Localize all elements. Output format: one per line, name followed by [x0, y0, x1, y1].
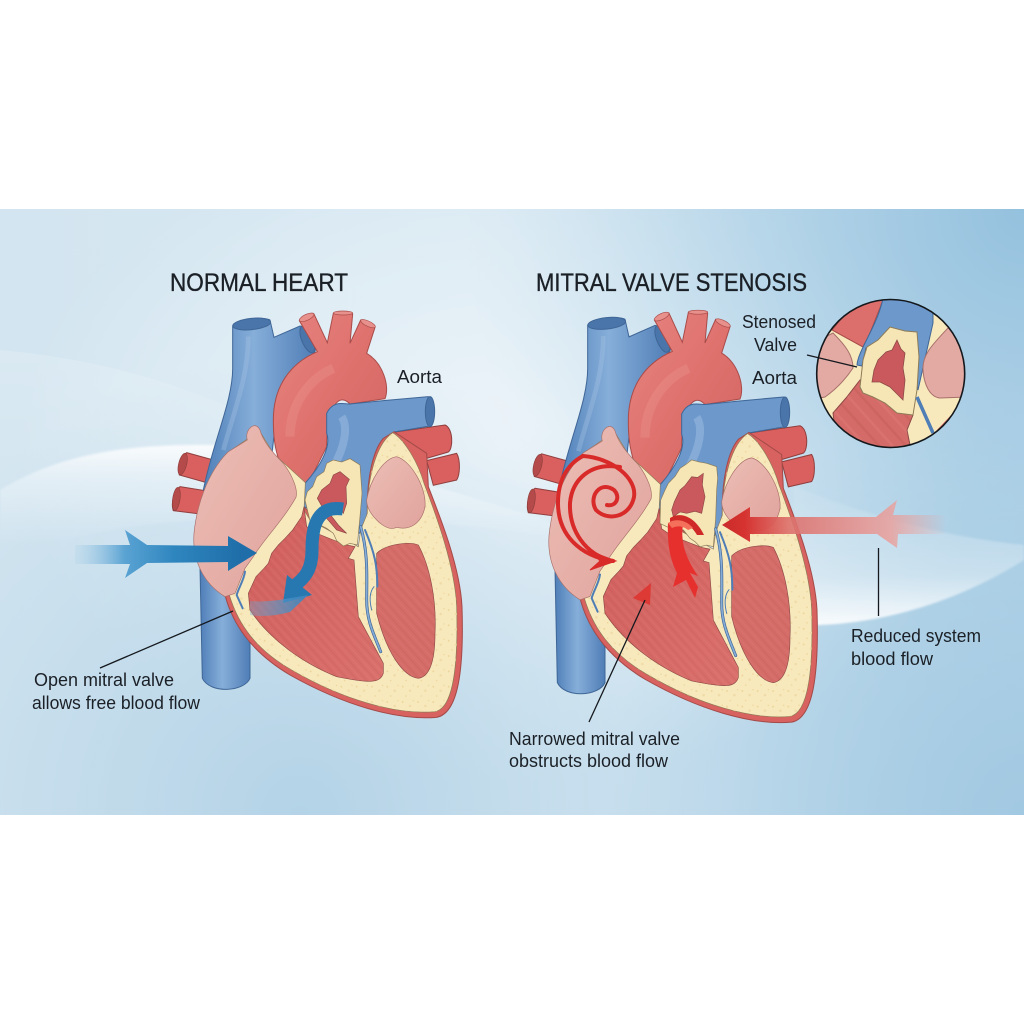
arrow: blue inflow: [75, 530, 257, 578]
heart outer wall: [225, 432, 462, 718]
label: open mitral valve: [32, 670, 201, 713]
label: narrowed mitral valve: obstructs blood flow: [509, 751, 669, 771]
heart outer wall: [580, 433, 817, 723]
inset: right chamber: [923, 328, 968, 398]
label: aorta right: Aorta: [752, 367, 798, 388]
main ventricle: [603, 509, 738, 686]
leader line: narrowed valve: [589, 600, 645, 722]
open valve ring: [305, 459, 362, 546]
label: reduced system blood flow: Reduced system: [851, 626, 981, 646]
background band: [0, 209, 1024, 815]
title: normal heart: NORMAL HEART: [170, 269, 348, 297]
vena cava upper: [203, 316, 318, 490]
arrow: small red triangle: [633, 583, 651, 605]
aortic arch: [273, 311, 387, 487]
inset: chordae: [917, 397, 933, 433]
label: stenosed valve: [742, 312, 816, 355]
label: stenosed valve: Valve: [754, 335, 797, 355]
leader line: reduced flow: [878, 548, 880, 616]
label: reduced system blood flow: blood flow: [851, 649, 934, 669]
inset: blue vessel: [857, 298, 933, 390]
inferior vena cava: [200, 567, 250, 689]
inset: narrowed orifice: [872, 340, 905, 400]
main ventricle: [248, 507, 383, 681]
narrowed valve: [660, 460, 718, 547]
inset: aorta: [832, 300, 883, 347]
arrow: reduced systemic flow: [722, 500, 945, 548]
aortic arch: [628, 310, 742, 488]
label: narrowed mitral valve: Narrowed mitral valve: [509, 729, 680, 749]
upper right chamber: [367, 457, 425, 529]
leader line: open mitral valve: [100, 611, 233, 668]
inset: left chamber: [818, 332, 854, 398]
right ventricle chamber: [377, 543, 435, 678]
arrow: blue flow through open valve: [250, 509, 343, 616]
label: narrowed mitral valve: [509, 729, 680, 771]
myocardium: [582, 433, 812, 717]
label: reduced system blood flow: [851, 626, 981, 669]
upper right chamber: [722, 458, 780, 531]
inset: magnified stenosed valve: [810, 298, 968, 452]
right atrium: [549, 426, 651, 600]
inset: lower chamber: [936, 414, 952, 432]
pulmonary artery: [304, 397, 435, 533]
label: stenosed valve: Stenosed: [742, 312, 816, 332]
chordae: [592, 529, 736, 656]
illustration: stenosis heart: [526, 310, 817, 723]
inferior vena cava: [555, 569, 605, 694]
right atrium: [194, 426, 296, 597]
label: aorta left: Aorta: [397, 366, 443, 387]
illustration: normal heart: [171, 311, 462, 718]
pulmonary veins: [171, 425, 459, 514]
vena cava upper: [558, 316, 673, 492]
leader line: stenosed valve: [807, 355, 857, 367]
label: open mitral valve: Open mitral valve: [34, 670, 174, 690]
arrow: swirl in atrium: [558, 456, 634, 570]
pulmonary artery: [659, 397, 790, 536]
chordae: [237, 527, 381, 652]
myocardium: [227, 432, 457, 712]
title: mitral valve stenosis: MITRAL VALVE STENOSIS: [536, 269, 807, 297]
label: open mitral valve: allows free blood flow: [32, 693, 201, 713]
pulmonary veins: [526, 426, 814, 516]
right ventricle chamber: [732, 546, 790, 683]
inset: muscle: [833, 380, 913, 452]
inset: valve ring: [860, 327, 919, 415]
arrow: turbulent flow in valve: [668, 515, 704, 598]
